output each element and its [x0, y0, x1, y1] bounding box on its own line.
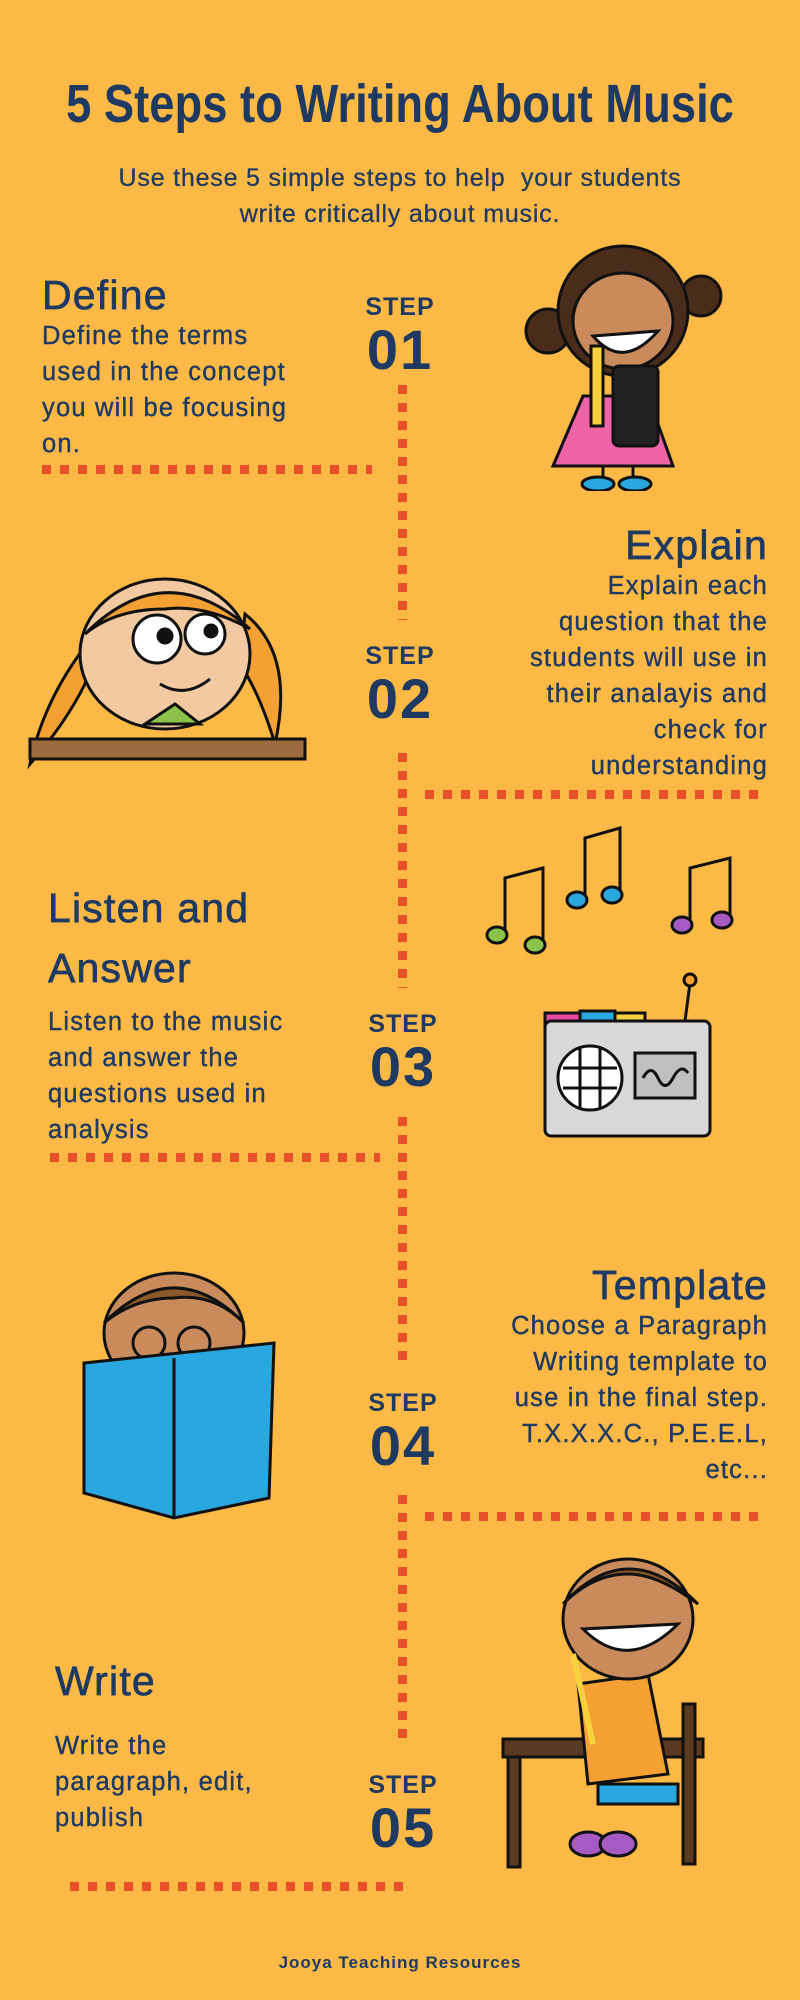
step 5 text: paragraph, edit,: [55, 1768, 253, 1796]
step 5 text: publish: [55, 1804, 144, 1832]
step 3 label: 03: [370, 1035, 436, 1098]
step 4 label: 04: [370, 1414, 436, 1477]
step 1 text: on.: [42, 430, 81, 458]
step 5 text: Write the: [55, 1732, 167, 1760]
illustration: boy at desk: [502, 1558, 704, 1868]
step 1 text: Define the terms: [42, 322, 248, 350]
title: 5 Steps to Writing About Music: [66, 74, 734, 134]
illustration: girl at desk: [27, 578, 306, 770]
horizontal dividers: [42, 465, 372, 474]
step 1 text: Define: [42, 272, 168, 318]
step 2 text: Explain: [625, 522, 768, 568]
subtitle: Use these 5 simple steps to help your students: [119, 164, 681, 192]
step 2 text: question that the: [559, 608, 768, 636]
step 5 label: STEP: [368, 1771, 438, 1799]
illustration: girl with book: [524, 244, 722, 491]
step 4 text: Template: [592, 1262, 768, 1308]
step 4 text: T.X.X.X.C., P.E.E.L,: [522, 1420, 768, 1448]
timeline vertical segments: [398, 385, 407, 620]
step 5 text: [54, 1658, 253, 1832]
step 3 text: questions used in: [48, 1080, 267, 1108]
step 3 label: STEP: [368, 1010, 438, 1038]
step 3 text: Listen and: [48, 885, 249, 931]
step 1 label: [365, 293, 435, 381]
step 5 label: 05: [370, 1796, 436, 1859]
step 4 text: etc...: [706, 1456, 768, 1484]
step 3 text: analysis: [48, 1116, 150, 1144]
step 3 text: [48, 885, 283, 1144]
step 2 text: [530, 522, 768, 780]
step 1 text: you will be focusing: [42, 394, 287, 422]
subtitle: write critically about music.: [240, 200, 560, 228]
step 4 label: STEP: [368, 1389, 438, 1417]
step 3 text: Answer: [48, 945, 192, 991]
step 1 text: [42, 272, 287, 458]
illustration: boy with book: [82, 1272, 276, 1520]
step 3 text: and answer the: [48, 1044, 239, 1072]
footer: Jooya Teaching Resources: [279, 1953, 521, 1972]
step 2 label: STEP: [365, 642, 435, 670]
step 1 text: used in the concept: [42, 358, 286, 386]
step 3 label: [368, 1010, 438, 1098]
step 4 label: [368, 1389, 438, 1477]
step 1 label: STEP: [365, 293, 435, 321]
step 4 text: Choose a Paragraph: [511, 1312, 768, 1340]
illustration: music notes and radio: [486, 826, 734, 1138]
step 2 text: their analayis and: [547, 680, 768, 708]
step 2 text: check for: [654, 716, 768, 744]
step 2 label: 02: [367, 667, 433, 730]
step 2 text: Explain each: [608, 572, 768, 600]
step 2 label: [365, 642, 435, 730]
step 3 text: Listen to the music: [48, 1008, 283, 1036]
step 2 text: understanding: [591, 752, 768, 780]
step 5 label: [368, 1771, 438, 1859]
subtitle: [119, 164, 681, 228]
step 5 text: Write: [55, 1658, 156, 1704]
step 4 text: Writing template to: [533, 1348, 768, 1376]
step 4 text: use in the final step.: [515, 1384, 768, 1412]
step 4 text: [511, 1262, 768, 1484]
step 2 text: students will use in: [530, 644, 768, 672]
step 1 label: 01: [367, 318, 433, 381]
